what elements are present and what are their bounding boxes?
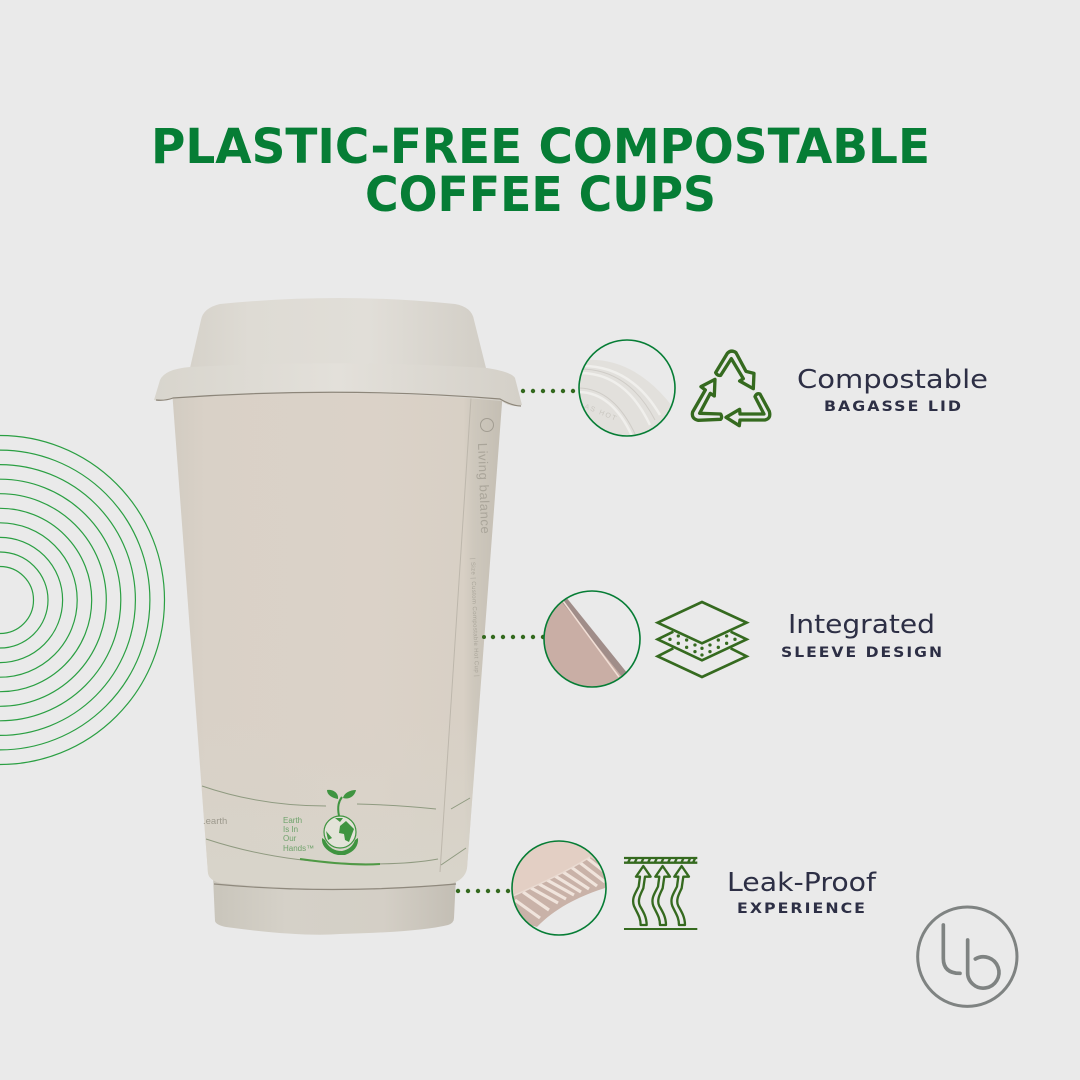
title: PLASTIC-FREE COMPOSTABLE [151,118,930,175]
text: compostable bagasse lid [797,365,988,415]
text: compostable bagasse lid: Compostable [797,365,988,395]
lid brim [154,363,522,406]
cup body [172,390,503,888]
text: leak-proof experience: EXPERIENCE [737,901,867,917]
cup printed lines [202,786,470,865]
earth in our hands slogan: Our [283,834,297,843]
icon: sleeve layers [658,602,747,677]
text: leak-proof experience: Leak-Proof [727,868,877,898]
text: integrated sleeve design: Integrated [788,610,935,640]
title [151,118,930,223]
lid top dome [190,298,487,372]
earth in our hands slogan: Is In [283,825,298,834]
coffee cup [172,390,503,935]
text: integrated sleeve design [781,610,944,661]
text: integrated sleeve design: SLEEVE DESIGN [781,645,944,661]
side seam [440,398,471,872]
detail circle: sleeve [540,591,640,690]
cup side text: .earth [203,816,227,827]
text: leak-proof experience [727,868,877,917]
dotted connector: base [456,889,510,893]
cup brand text [469,418,494,677]
title: COFFEE CUPS [365,166,716,223]
earth in our hands slogan: Hands™ [283,844,314,853]
cup brand text: | Size | Custom Compostable Hot Cup | [469,558,479,677]
text: compostable bagasse lid: BAGASSE LID [824,399,963,415]
detail circle: lid [575,340,675,436]
dotted connector: sleeve [482,635,545,639]
detail circle: ribbed base [510,840,610,935]
bagasse lid [154,298,522,406]
icon: heat arrows [624,858,697,929]
icon: recycle [692,351,770,426]
earth in our hands slogan: Earth [283,816,302,825]
logo: lb [918,907,1017,1006]
icon: globe with sprout and hands [322,790,358,855]
dotted connector: lid [521,389,575,393]
cup brand text: Living balance [475,443,493,535]
detail circle: lid: AS HOT [583,403,618,423]
cup base ring [213,876,456,935]
decorative concentric rings [0,436,164,764]
earth in our hands slogan [283,816,314,853]
